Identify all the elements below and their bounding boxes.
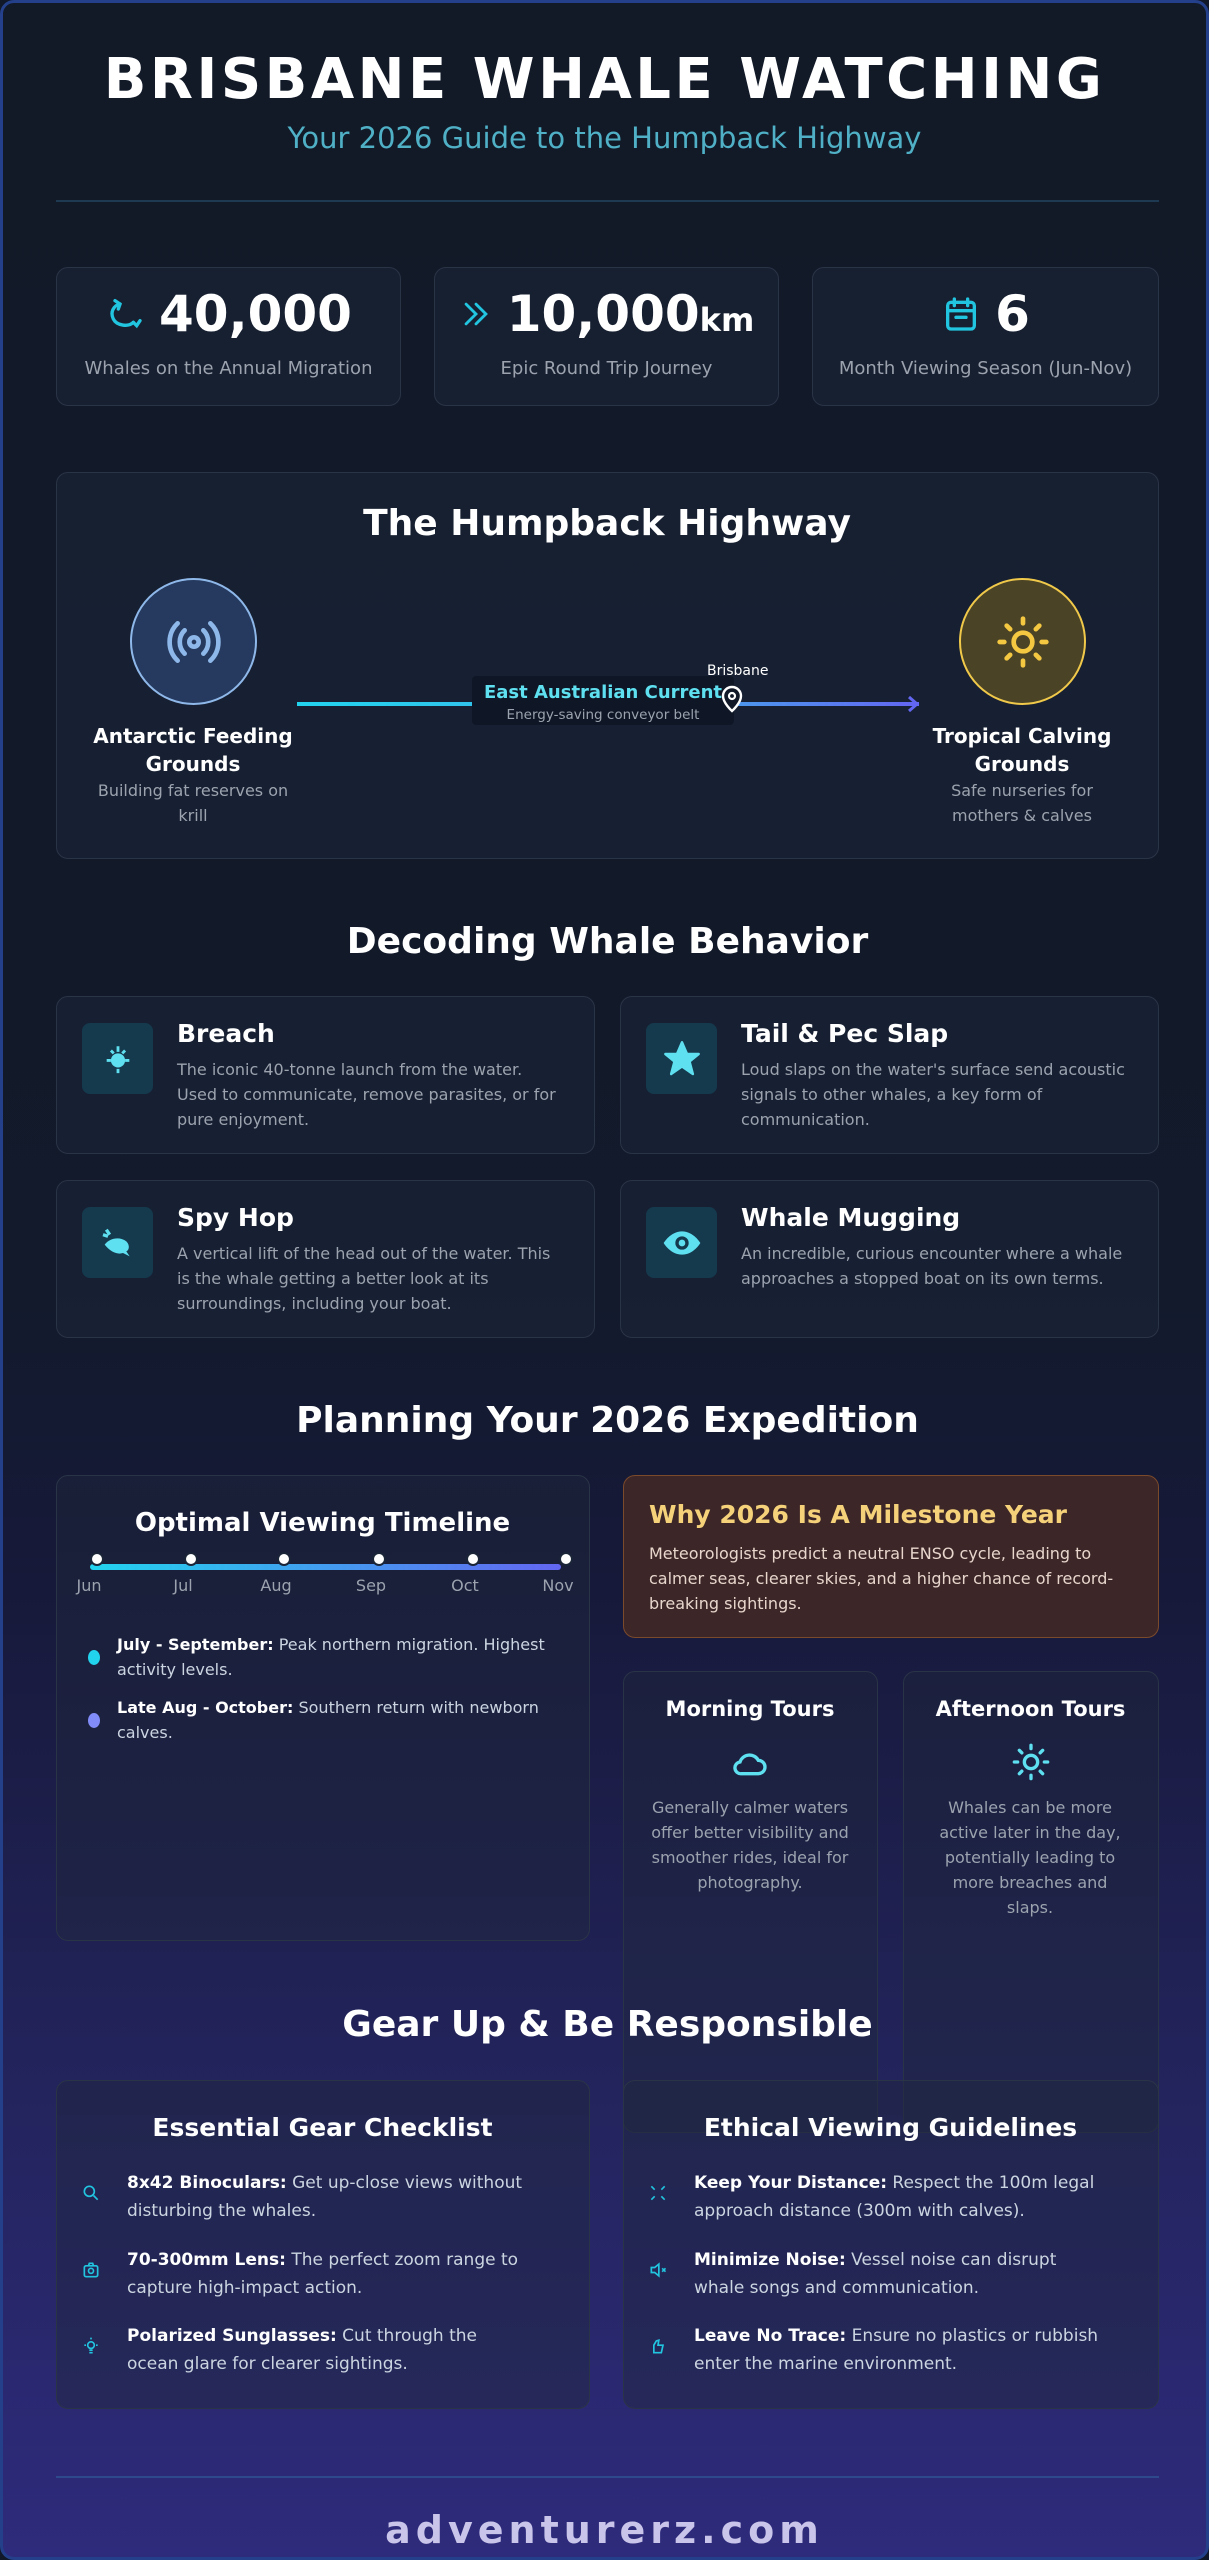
card: spy hop — [56, 1180, 595, 1338]
brisbane pin: Brisbane — [707, 663, 768, 679]
month labels: Sep — [356, 1576, 386, 1595]
legend item 2: Late Aug - October: Southern return with newborn calves. — [117, 1698, 539, 1742]
panel: timeline — [56, 1475, 590, 1941]
stat card: distance: Epic Round Trip Journey — [501, 358, 712, 379]
route line — [297, 702, 919, 706]
item: binoculars: 8x42 Binoculars: Get up-close views without disturbing the whales. — [127, 2173, 522, 2221]
icon: antarctic circle — [130, 578, 257, 705]
card: afternoon tours: Afternoon Tours — [936, 1697, 1125, 1721]
card: morning tours — [623, 1671, 878, 2133]
card: mugging — [620, 1180, 1159, 1338]
card: spy hop: A vertical lift of the head out of the water. This is the whale getting a better look at its surroundings, including your boat. — [177, 1244, 550, 1313]
legend item 1: July - September: Peak northern migration. Highest activity levels. — [117, 1635, 545, 1679]
panel: humpback highway: Safe nurseries for mothers & calves — [951, 781, 1093, 825]
heading: behavior: Decoding Whale Behavior — [347, 921, 868, 962]
subtitle: Your 2026 Guide to the Humpback Highway — [288, 121, 921, 155]
card: mugging: Whale Mugging — [741, 1203, 960, 1232]
stat card: whales — [56, 267, 401, 406]
month labels — [76, 1576, 574, 1595]
stat card: months: Month Viewing Season (Jun-Nov) — [839, 358, 1132, 379]
icon: tropical circle — [959, 578, 1086, 705]
item: no trace: Leave No Trace: Ensure no plastics or rubbish enter the marine environment. — [694, 2326, 1098, 2374]
card: morning tours: Morning Tours — [666, 1697, 834, 1721]
label: antarctic: Antarctic Feeding Grounds — [93, 724, 293, 776]
card: tail slap: Tail & Pec Slap — [741, 1019, 948, 1048]
card: mugging: An incredible, curious encounter where a whale approaches a stopped boat on its own terms. — [741, 1244, 1122, 1288]
item: lens: 70-300mm Lens: The perfect zoom range to capture high-impact action. — [127, 2250, 518, 2298]
month labels: Jun — [76, 1576, 102, 1595]
panel: ethical guidelines — [623, 2080, 1159, 2409]
panel: timeline: Optimal Viewing Timeline — [135, 1508, 510, 1538]
card: tail slap: Loud slaps on the water's surface send acoustic signals to other whales, a key form of communication. — [741, 1060, 1125, 1129]
card: afternoon tours — [903, 1671, 1159, 2133]
panel: ethical guidelines: Ethical Viewing Guidelines — [704, 2113, 1077, 2142]
current label: Energy-saving conveyor belt — [507, 707, 699, 723]
panel: humpback highway: Building fat reserves on krill — [98, 781, 288, 825]
label: tropical: Tropical Calving Grounds — [933, 724, 1111, 776]
heading: gear: Gear Up & Be Responsible — [342, 2004, 873, 2045]
card: morning tours: Generally calmer waters offer better visibility and smoother rides, ideal for photography. — [651, 1798, 849, 1892]
card: breach — [56, 996, 595, 1154]
stat card: distance — [434, 267, 779, 406]
card: afternoon tours: Whales can be more active later in the day, potentially leading to more breaches and slaps. — [939, 1798, 1121, 1917]
item: distance: Keep Your Distance: Respect the 100m legal approach distance (300m with calves). — [694, 2173, 1094, 2221]
highway heading: The Humpback Highway — [363, 503, 851, 544]
stat card: whales: 40,000 — [159, 285, 352, 343]
callout: milestone: Meteorologists predict a neutral ENSO cycle, leading to calmer seas, clearer skies, and a higher chance of record-breaking sightings. — [649, 1544, 1113, 1613]
timeline bar — [90, 1564, 561, 1570]
callout: milestone: Why 2026 Is A Milestone Year — [649, 1500, 1067, 1529]
title: BRISBANE WHALE WATCHING — [104, 47, 1105, 112]
month labels: Aug — [260, 1576, 292, 1595]
stat card: months: 6 — [995, 285, 1030, 343]
month labels: Nov — [542, 1576, 574, 1595]
item: noise: Minimize Noise: Vessel noise can disrupt whale songs and communication. — [694, 2250, 1056, 2298]
stat card: distance: 10,000km — [507, 285, 754, 343]
month labels: Jul — [173, 1576, 193, 1595]
footer: adventurerz.com — [385, 2508, 824, 2552]
stat card: whales: Whales on the Annual Migration — [84, 358, 372, 379]
brisbane pin — [707, 663, 768, 712]
panel: gear checklist: Essential Gear Checklist — [152, 2113, 493, 2142]
card: breach: Breach — [177, 1019, 275, 1048]
item: sunglasses: Polarized Sunglasses: Cut through the ocean glare for clearer sightings. — [127, 2326, 477, 2374]
current label — [472, 676, 734, 725]
card: breach: The iconic 40-tonne launch from the water. Used to communicate, remove parasites, or for pure enjoyment. — [177, 1060, 556, 1129]
month labels: Oct — [451, 1576, 479, 1595]
callout: milestone — [623, 1475, 1159, 1638]
card: spy hop: Spy Hop — [177, 1203, 294, 1232]
current label: East Australian Current — [484, 682, 722, 703]
panel: humpback highway — [56, 472, 1159, 859]
stat card: months — [812, 267, 1159, 406]
card: tail slap — [620, 996, 1159, 1154]
panel: gear checklist — [56, 2080, 590, 2409]
heading: planning: Planning Your 2026 Expedition — [296, 1400, 919, 1441]
